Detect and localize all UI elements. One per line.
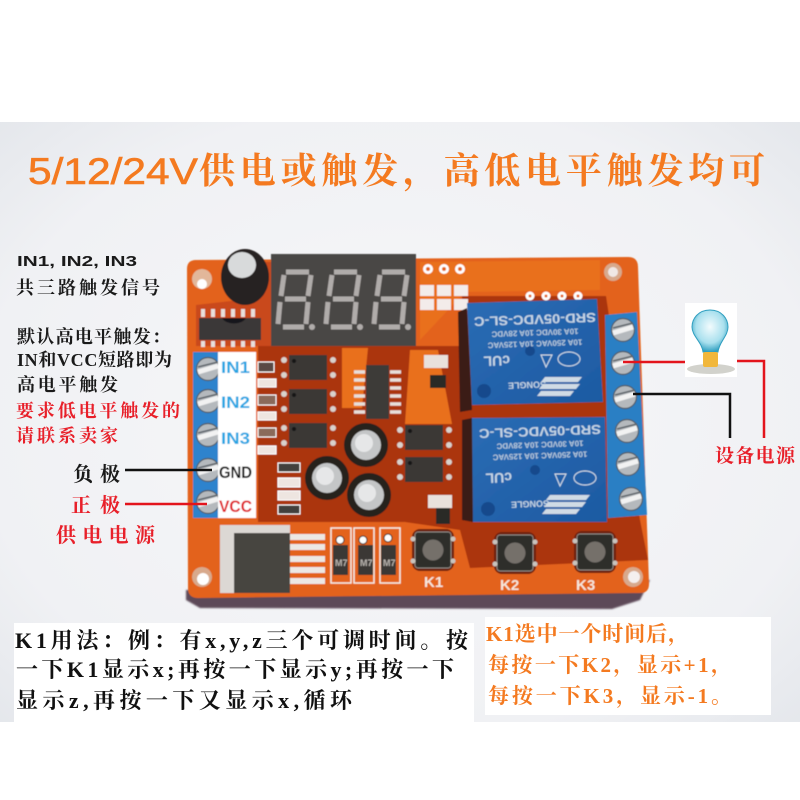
- relay 1: [458, 299, 603, 412]
- left text: default high level trigger: IN和VCC短路即为: [17, 350, 172, 370]
- M7 diodes: M7: [335, 558, 348, 568]
- board shadow: [186, 580, 650, 609]
- input label strip: [218, 352, 256, 518]
- dark area under top cap: [196, 262, 272, 346]
- left text: trigger channels: IN1, IN2, IN3: [17, 253, 137, 270]
- left text: default high level trigger: 默认高电平触发：: [17, 326, 170, 347]
- button labels: K1: [424, 574, 443, 591]
- title: 5/12/24V: [28, 151, 198, 192]
- power supply label: 供电电源: [56, 523, 157, 547]
- left text: low level note: [16, 401, 180, 446]
- photo background: [0, 122, 800, 722]
- mounting hole bottom right: [623, 567, 643, 587]
- black load wire: [633, 394, 730, 438]
- top left IC: [199, 309, 261, 347]
- left text: trigger channels: 共三路触发信号: [16, 277, 160, 298]
- mounting hole top right: [604, 263, 622, 281]
- central IC: [354, 365, 401, 419]
- button labels: K2: [500, 577, 519, 594]
- header pads: [420, 266, 581, 310]
- optocouplers left: [281, 355, 336, 448]
- panel: K1 usage: [14, 623, 474, 722]
- left text: trigger channels: [16, 253, 160, 298]
- relay terminal block: [605, 312, 647, 518]
- red load wire: [623, 361, 764, 438]
- left text: default high level trigger: [17, 326, 172, 395]
- M7 diodes: M7: [383, 558, 396, 568]
- input label strip: GND: [219, 463, 252, 482]
- electrolytic capacitors: [305, 423, 391, 517]
- light bulb icon: [685, 303, 737, 377]
- title: 供电或触发，高低电平触发均可: [199, 151, 765, 192]
- positive wire: [125, 503, 207, 505]
- relay 2: SRD-05VDC-SL-C: [478, 422, 601, 441]
- negative label: 负极: [73, 463, 120, 486]
- relay 2: 10A 30VDC 10A 28VDC: [496, 438, 584, 451]
- relay 2: cUL: [485, 470, 512, 487]
- M7 diodes: M7: [360, 558, 373, 568]
- mounting hole bottom left: [192, 567, 212, 587]
- panel: K1 usage: K1用法：例：有x,y,z三个可调时间。按: [15, 628, 470, 653]
- left text: low level note: 请联系卖家: [16, 425, 118, 446]
- relay 1: cUL: [483, 353, 510, 370]
- transistor lower: [428, 495, 452, 524]
- mounting hole top left: [192, 269, 212, 289]
- relay 2: 10A 250VAC 10A 125VAC: [492, 449, 587, 462]
- panel: K2 K3 usage: K1选中一个时间后，: [486, 622, 689, 647]
- device power label: 设备电源: [715, 445, 796, 467]
- input terminal block: [193, 352, 220, 518]
- top capacitor: [221, 249, 269, 305]
- left text: low level note: 要求低电平触发的: [16, 401, 180, 421]
- relay 1: SONGLE: [508, 379, 546, 391]
- input label strip: IN2: [221, 393, 250, 412]
- relay 1: SRD-05VDC-SL-C: [473, 310, 596, 329]
- input label strip: VCC: [219, 497, 252, 516]
- relay 2: [462, 417, 607, 522]
- transistor: [424, 355, 448, 388]
- negative wire: [125, 469, 212, 471]
- voltage regulator: [220, 525, 325, 593]
- button labels: K3: [576, 577, 595, 594]
- relay 1: 10A 30VDC 10A 28VDC: [491, 326, 579, 339]
- panel: K2 K3 usage: [485, 617, 771, 715]
- board base: [187, 257, 649, 598]
- dark copper traces area: [258, 296, 648, 568]
- optocouplers right: [397, 425, 452, 482]
- button labels: [424, 574, 595, 594]
- orange copper patches: [342, 260, 600, 424]
- panel: K2 K3 usage: 每按一下K2，显示+1，: [488, 653, 732, 678]
- circuit board: [186, 249, 650, 609]
- panel: K1 usage: 显示z,再按一下又显示x,循环: [16, 688, 354, 713]
- panel: K2 K3 usage: 每按一下K3，显示-1。: [488, 684, 732, 709]
- relay 1: 10A 250VAC 10A 125VAC: [487, 337, 582, 350]
- seven segment display: [271, 254, 416, 346]
- panel: K1 usage: 一下K1显示x;再按一下显示y;再按一下: [16, 657, 455, 682]
- input label strip: IN3: [221, 429, 250, 448]
- buttons: [410, 529, 618, 574]
- relay 2: SONGLE: [511, 498, 549, 510]
- input label strip: IN1: [221, 358, 250, 377]
- left text: default high level trigger: 高电平触发: [17, 374, 118, 395]
- small SMD parts: [258, 362, 300, 514]
- positive label: 正极: [71, 494, 120, 517]
- M7 diodes: [331, 528, 400, 583]
